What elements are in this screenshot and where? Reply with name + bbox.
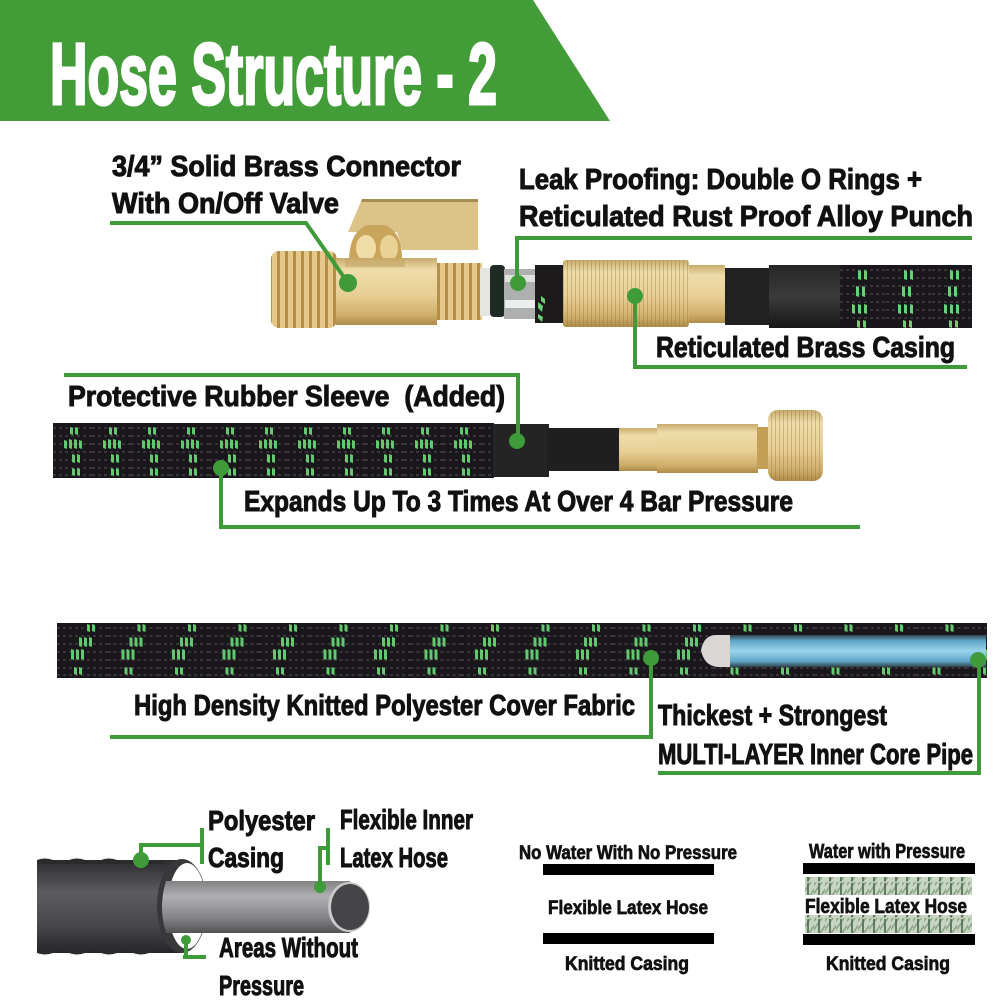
label line 1: 3/4” Solid Brass Connector xyxy=(112,151,461,183)
label: Reticulated Brass Casing xyxy=(656,332,955,364)
label line 1: Polyester xyxy=(208,805,315,836)
panel: pressure diagram, no water xyxy=(519,843,737,975)
label line 2: Latex Hose xyxy=(340,842,448,873)
panel: hose with rubber sleeve and nut xyxy=(53,410,823,481)
lower casing bar xyxy=(543,933,714,944)
icon: valve body xyxy=(336,258,437,325)
icon: reticulated brass casing xyxy=(563,260,689,327)
icon: valve handle xyxy=(348,199,478,262)
icon: second thread xyxy=(437,263,482,320)
label: Protective Rubber Sleeve (Added) xyxy=(68,381,505,413)
label: hose: Flexible Latex Hose xyxy=(805,896,967,918)
label line 1: Leak Proofing: Double O Rings + xyxy=(519,164,922,196)
icon: knitted hose xyxy=(53,423,494,478)
callout: protective rubber sleeve xyxy=(64,375,525,449)
callout: inner core pipe xyxy=(658,652,986,773)
label: no water: No Water With No Pressure xyxy=(519,843,737,864)
icon: brass ferrule xyxy=(619,424,769,473)
callout: leak proofing xyxy=(510,164,973,291)
icon: knit before casing xyxy=(535,265,565,323)
icon: outer casing xyxy=(37,858,207,954)
label: casing: Knitted Casing xyxy=(565,954,689,975)
callout: knitted cover fabric xyxy=(110,650,659,737)
callout: brass connector xyxy=(110,151,461,292)
lower casing bar xyxy=(803,934,975,945)
upper casing bar xyxy=(803,863,975,874)
label: hose: Flexible Latex Hose xyxy=(548,898,708,919)
upper pressurised band xyxy=(805,877,972,895)
icon: casing collar xyxy=(689,265,725,323)
title: Hose Structure - 2 xyxy=(50,26,497,123)
upper casing bar xyxy=(543,864,714,875)
callout: inner latex hose xyxy=(314,804,473,893)
label line 1: Thickest + Strongest xyxy=(658,700,887,732)
label: casing: Knitted Casing xyxy=(826,954,950,975)
callout: areas without pressure xyxy=(181,932,358,1000)
callout: polyester casing xyxy=(133,805,315,873)
icon: rubber sleeve xyxy=(725,265,841,328)
title banner xyxy=(0,0,610,123)
label line 2: With On/Off Valve xyxy=(112,188,339,220)
icon: male thread end xyxy=(271,251,337,328)
lower pressurised band xyxy=(805,915,972,933)
label line 2: Reticulated Rust Proof Alloy Punch xyxy=(519,201,973,233)
callout: reticulated brass casing xyxy=(627,288,967,367)
icon: o-rings xyxy=(480,265,536,319)
icon: blue inner core xyxy=(730,635,986,667)
label: Expands Up To 3 Times At Over 4 Bar Pressure xyxy=(244,486,793,518)
panel: tube cross-section xyxy=(37,858,370,954)
panel: brass connector hose assembly xyxy=(271,199,972,328)
label line 2: Casing xyxy=(208,842,284,873)
icon: rubber sleeve xyxy=(493,424,619,477)
icon: knitted hose xyxy=(840,265,972,328)
panel: hose cutaway xyxy=(57,623,987,678)
panel: pressure diagram, water xyxy=(803,841,975,975)
icon: white tube end xyxy=(701,635,736,667)
icon: brass nut xyxy=(768,410,823,481)
icon: knitted cover xyxy=(57,623,987,678)
label line 1: Flexible Inner xyxy=(340,804,473,835)
label: water: Water with Pressure xyxy=(809,841,965,863)
callout: expands xyxy=(213,460,860,527)
label line 1: Areas Without xyxy=(219,932,358,963)
icon: inner latex tube xyxy=(162,881,370,933)
label: High Density Knitted Polyester Cover Fabric xyxy=(134,690,635,722)
